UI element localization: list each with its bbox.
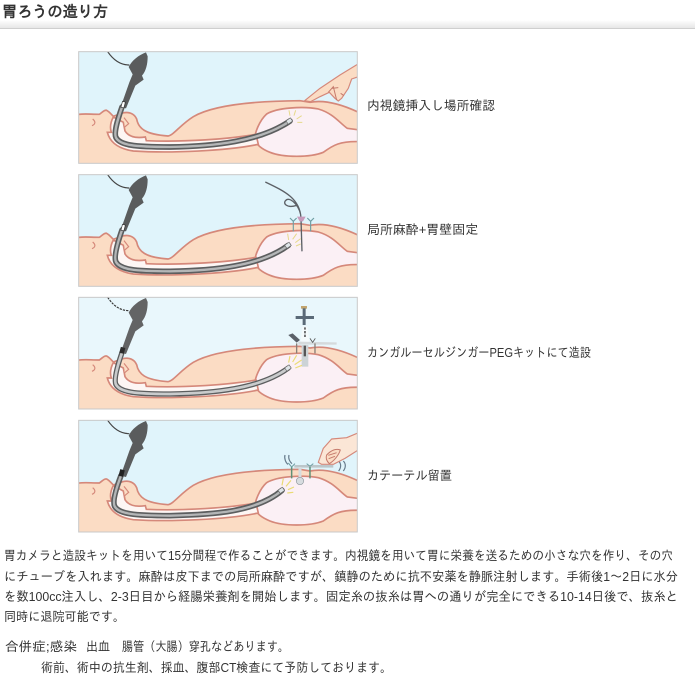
label: step 1: 内視鏡挿入し場所確認 xyxy=(367,98,495,113)
text block: complications: 腸管（大腸）穿孔などあります。 xyxy=(122,639,289,654)
icon: hand pulling catheter xyxy=(318,433,359,464)
icon: endoscope tube xyxy=(115,107,290,147)
icon: pointing hand xyxy=(305,64,359,102)
icon: T-handle introducer xyxy=(288,306,337,367)
label: step 2: 局所麻酔+胃壁固定 xyxy=(367,222,478,237)
text block: procedure description: 同時に退院可能です。 xyxy=(4,609,125,624)
header bar xyxy=(0,20,695,29)
text block: complications xyxy=(5,639,392,675)
icon: light rays xyxy=(289,110,302,122)
icon: guide wire xyxy=(265,182,302,251)
label: step 3: カンガルーセルジンガーPEGキットにて造設 xyxy=(367,345,591,360)
icon: light rays xyxy=(282,479,294,493)
label: step 4: カテーテル留置 xyxy=(367,468,452,483)
icon: endoscope tube xyxy=(115,353,288,394)
text block: procedure description: を数100cc注入し、2-3日目から経腸栄養剤を開始します。固定糸の抜糸は胃への通りが完全にできる10-14日後で、抜糸と xyxy=(4,589,678,604)
icon: fixation anchors xyxy=(290,218,314,231)
text block: procedure description xyxy=(4,548,678,624)
icon: light rays xyxy=(288,234,301,246)
text block: complications: 出血 xyxy=(86,639,110,654)
text block: complications: 術前、術中の抗生剤、採血、腹部CT検査にて予防しております。 xyxy=(41,660,392,675)
icon: endoscope tube xyxy=(114,476,282,516)
icon: anesthetic port xyxy=(297,217,306,221)
text block: complications: 合併症;感染 xyxy=(5,639,77,654)
panel: step 1 endoscope insertion xyxy=(77,52,360,166)
panel: step 4 catheter placement xyxy=(77,420,360,534)
panel: step 2 local anesthesia and gastric wall fixation xyxy=(77,175,360,289)
icon: endoscope tube xyxy=(115,230,288,271)
panel: step 3 PEG kit placement xyxy=(77,297,360,411)
icon: catheter with bumper xyxy=(285,455,345,485)
icon: light rays xyxy=(289,355,302,368)
title: 胃ろうの造り方 xyxy=(2,3,108,21)
